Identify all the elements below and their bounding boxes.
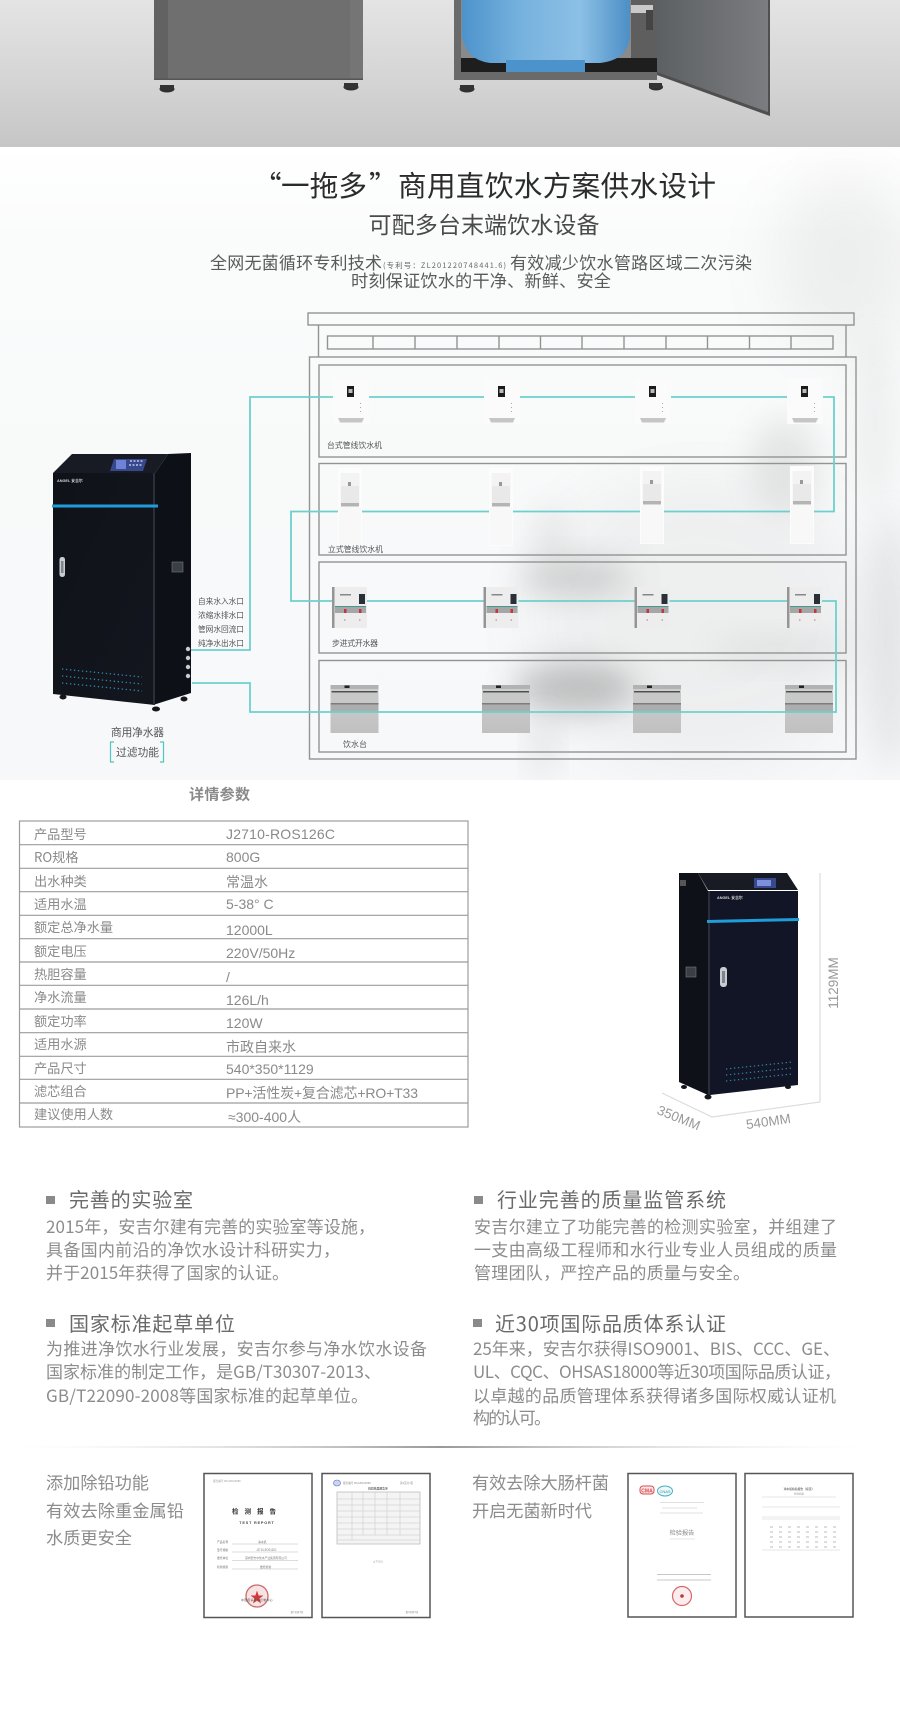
description text: 时刻保证饮水的干净、新鲜、安全	[351, 267, 611, 292]
text block: complete laboratory	[46, 1184, 375, 1284]
table: specifications: 额定功率	[34, 1011, 87, 1030]
port labels: 浓缩水排水口	[198, 610, 244, 621]
teal water pipe network	[190, 397, 836, 712]
text block: lead removal: 水质更安全	[46, 1524, 132, 1549]
row labels: 立式管线饮水机	[328, 544, 383, 555]
document: test report cover: 第1页共3页	[291, 1610, 304, 1614]
document: inspection report cover	[628, 1474, 736, 1617]
panel: system diagram background	[0, 147, 900, 782]
text block: international certifications: 以卓越的品质管理体系获得诸多国际权威认证机	[473, 1382, 836, 1407]
text block: international certifications: 25年来，安吉尔获得ISO9001、BIS、CCC、GE、	[473, 1335, 840, 1360]
subtitle: 可配多台末端饮水设备	[368, 206, 600, 240]
icon: commercial water purifier cabinet	[52, 453, 191, 712]
divider	[10, 1446, 870, 1448]
icon: closed cabinet	[154, 0, 363, 92]
table: specifications: 120W	[226, 1015, 263, 1031]
description text: 有效减少饮水管路区域二次污染	[510, 249, 752, 274]
table: specifications: 常温水	[226, 874, 268, 890]
document: test report cover: 委托单位	[217, 1556, 228, 1560]
table: specifications: 5-38° C	[226, 896, 274, 912]
text block: lead removal: 添加除铅功能	[46, 1469, 149, 1494]
table: specifications: J2710-ROS126C	[226, 826, 335, 842]
table: specifications: 市政自来水	[226, 1039, 296, 1055]
icon: commercial water purifier cabinet: ANGEL 安吉尔	[57, 478, 83, 483]
table: specifications: 540*350*1129	[226, 1061, 314, 1077]
callout: filter function	[110, 742, 164, 762]
panel: row 1	[319, 365, 846, 457]
document: test report cover: 深圳安吉尔饮水产业集团有限公司	[245, 1556, 287, 1560]
document: test report cover: 报告编号 WSJ20160298	[213, 1479, 241, 1483]
table: specifications: 适用水源	[34, 1034, 87, 1053]
document: inspection report table: 检验结果	[794, 1492, 804, 1496]
document: test report table: 以下空白	[373, 1560, 383, 1564]
table: specifications: 净水流量	[34, 987, 87, 1006]
port labels: 纯净水出水口	[198, 638, 244, 649]
building outline	[308, 313, 856, 759]
table: specifications: 出水种类	[34, 871, 87, 890]
text block: quality supervision: 一支由高级工程师和水行业专业人员组成的质量	[474, 1236, 837, 1261]
port labels: 自来水入水口	[198, 596, 244, 607]
text block: E. coli removal	[472, 1469, 609, 1522]
panel: row 3	[319, 562, 846, 653]
document: test report cover: J2710-ROS126C	[256, 1548, 277, 1552]
description text: 全网无菌循环专利技术	[210, 249, 382, 274]
document: test report table	[322, 1474, 430, 1618]
document: test report cover: 净水机	[258, 1540, 267, 1544]
document: test report table: 报告编号 WSJ20160298	[343, 1481, 371, 1485]
table: specifications: 热胆容量	[34, 964, 87, 983]
row labels: 饮水台	[343, 739, 367, 750]
document: test report table: 第2页共3页	[400, 1481, 414, 1485]
document: inspection report table: 净水机检验报告（续页）	[784, 1487, 814, 1491]
title	[253, 164, 716, 205]
table: specifications: 滤芯组合	[34, 1081, 87, 1100]
row labels: 台式管线饮水机	[327, 440, 382, 451]
heading: parameters: 详情参数	[189, 784, 250, 804]
document: inspection report cover: CNAS	[659, 1489, 671, 1494]
panel: row 4	[319, 660, 846, 752]
port labels: 管网水回流口	[198, 624, 244, 635]
title: 一拖多	[281, 164, 367, 205]
description text: (专利号：ZL201220748441.6)	[383, 260, 506, 271]
document: test report table: 第2页共3页	[406, 1610, 419, 1614]
text block: national standards: 为推进净饮水行业发展，安吉尔参与净水饮水设备	[46, 1335, 427, 1360]
text block: international certifications: UL、CQC、OHSAS18000等近30项国际品质认证，	[473, 1358, 841, 1383]
title: ”	[369, 164, 398, 205]
text block: national standards: GB/T22090-2008等国家标准的起草单位。	[46, 1382, 368, 1407]
icon: product with dimension lines	[655, 873, 841, 1133]
document: test report cover: 产品名称	[217, 1540, 228, 1544]
table: specifications: 适用水温	[34, 894, 87, 913]
table: specifications: ≈300-400人	[228, 1109, 301, 1125]
icons: row 4 drinking stations	[330, 685, 833, 733]
table: specifications: /	[226, 969, 230, 985]
document: test report cover: 委托检验	[260, 1565, 271, 1569]
document: test report cover: 检验类别	[217, 1565, 228, 1569]
text block: quality supervision	[474, 1184, 837, 1284]
document: test report cover: 检测报告	[232, 1506, 282, 1516]
callout: filter function: 过滤功能	[116, 744, 159, 760]
document: inspection report table	[745, 1474, 853, 1617]
document: test report cover: 型号规格	[217, 1548, 228, 1552]
table: specifications: 建议使用人数	[34, 1104, 113, 1123]
document: inspection report cover: CMA	[641, 1488, 653, 1494]
text block: national standards: 国家标准起草单位	[69, 1308, 235, 1337]
height label: 1129MM	[826, 957, 841, 1009]
text block: international certifications	[473, 1308, 841, 1429]
text block: complete laboratory: 并于2015年获得了国家的认证。	[46, 1259, 289, 1284]
panel: top product photo	[0, 0, 900, 147]
table: specifications: 12000L	[226, 922, 273, 938]
table: specifications: 220V/50Hz	[226, 945, 295, 961]
icons: row 1 desktop dispensers	[333, 379, 823, 424]
text block: quality supervision: 管理团队，严控产品的质量与安全。	[474, 1259, 750, 1284]
row labels: 步进式开水器	[332, 638, 378, 649]
table: specifications	[20, 821, 468, 1127]
table: specifications: RO规格	[34, 847, 79, 866]
document: test report table: 检验结果报告单	[368, 1486, 388, 1490]
text block: E. coli removal: 开启无菌新时代	[472, 1497, 592, 1522]
table: specifications: PP+活性炭+复合滤芯+RO+T33	[226, 1085, 418, 1101]
text block: international certifications: 构的认可。	[473, 1404, 551, 1429]
row labels	[327, 440, 383, 750]
text block: national standards: 国家标准的制定工作，是GB/T30307-2013、	[46, 1358, 381, 1383]
document: test report cover: 中国疾病预防控制中心	[241, 1598, 273, 1602]
icons: row 3 stepped boilers	[332, 587, 822, 628]
description text	[210, 249, 752, 292]
table: specifications: 额定总净水量	[34, 917, 113, 936]
document: test report cover: TEST REPORT	[239, 1521, 275, 1525]
table: specifications: 额定电压	[34, 941, 87, 960]
title: “	[253, 164, 282, 205]
text block: quality supervision: 安吉尔建立了功能完善的检测实验室，并组建了	[474, 1213, 837, 1238]
text block: national standards	[46, 1308, 427, 1407]
document: test report cover	[204, 1474, 312, 1618]
table: specifications: 126L/h	[226, 992, 269, 1008]
text block: quality supervision: 行业完善的质量监管系统	[497, 1184, 726, 1213]
text block: E. coli removal: 有效去除大肠杆菌	[472, 1469, 609, 1494]
depth label: 350MM	[655, 1102, 702, 1133]
title: 商用直饮水方案供水设计	[398, 164, 716, 205]
text block: lead removal: 有效去除重金属铅	[46, 1497, 184, 1522]
text block: complete laboratory: 完善的实验室	[69, 1184, 193, 1213]
table: specifications: 产品型号	[34, 824, 87, 843]
icon: open cabinet with blue pressure tank	[454, 0, 770, 116]
icons: row 2 standing dispensers	[338, 466, 814, 546]
text block: international certifications: 近30项国际品质体系认证	[495, 1308, 726, 1337]
text block: lead removal	[46, 1469, 184, 1549]
document: inspection report cover: 检验报告	[670, 1528, 694, 1537]
table: specifications: 产品尺寸	[34, 1058, 87, 1077]
text block: complete laboratory: 具备国内前沿的净饮水设计科研实力，	[46, 1236, 340, 1261]
width label: 540MM	[745, 1111, 792, 1132]
port labels	[198, 596, 244, 649]
panel: row 2	[319, 464, 846, 555]
table: specifications: 800G	[226, 849, 260, 865]
icon: product with dimension lines: ANGEL 安吉尔	[717, 895, 743, 900]
text block: complete laboratory: 2015年，安吉尔建有完善的实验室等设施，	[46, 1213, 375, 1238]
caption: commercial purifier: 商用净水器	[111, 725, 164, 740]
